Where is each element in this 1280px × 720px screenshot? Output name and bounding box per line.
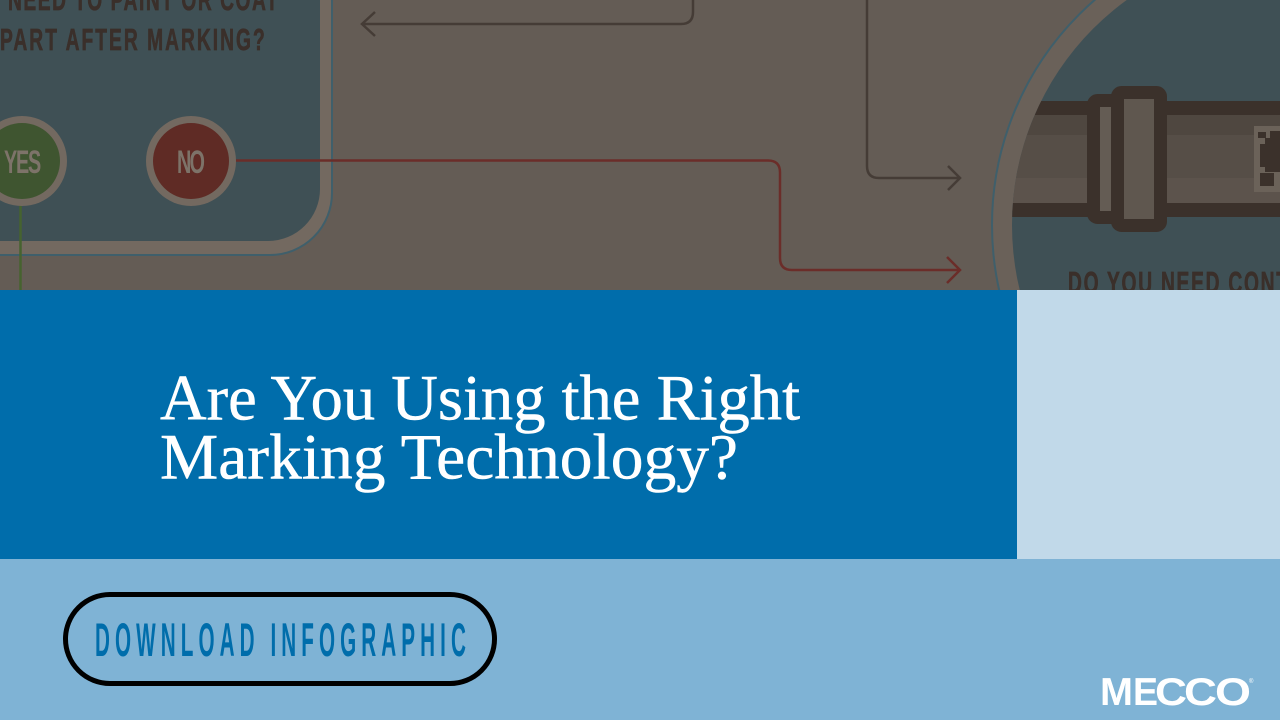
button: no: NO — [177, 144, 205, 180]
button: download infographic — [66, 594, 494, 684]
logo: MECCO: C — [1155, 671, 1187, 714]
title — [160, 362, 800, 494]
panel: footer band — [0, 559, 1280, 720]
arrow: green yes line — [19, 205, 22, 290]
panel: blue title block — [0, 290, 1017, 559]
title: Are You Using the Right — [160, 362, 800, 434]
logo: MECCO: E — [1133, 671, 1158, 714]
icon: marked pipe — [1000, 92, 1280, 226]
icon: data matrix code — [1254, 126, 1280, 192]
logo: MECCO: ® — [1249, 678, 1254, 685]
panel: pale blue block — [1017, 290, 1280, 559]
logo: MECCO: C — [1184, 671, 1217, 714]
panel: paint or coat question — [0, 0, 332, 255]
arrow: dark left arrow — [362, 0, 693, 36]
arrow: dark right arrow — [867, 0, 960, 190]
panel: dimmed flowchart background — [0, 0, 1280, 290]
logo: MECCO: M — [1100, 671, 1133, 714]
button: yes — [0, 116, 67, 206]
title: Marking Technology? — [160, 422, 738, 494]
logo: MECCO — [1100, 671, 1254, 714]
question text: PART AFTER MARKING? — [0, 24, 265, 57]
button: yes: YES — [4, 144, 41, 180]
button: download infographic: DOWNLOAD INFOGRAPHIC — [95, 613, 466, 666]
panel: contrast circle — [991, 0, 1280, 290]
arrow: red no path — [236, 160, 960, 283]
logo: MECCO: O — [1215, 671, 1251, 714]
question text — [0, 0, 278, 57]
button: no — [146, 116, 236, 206]
